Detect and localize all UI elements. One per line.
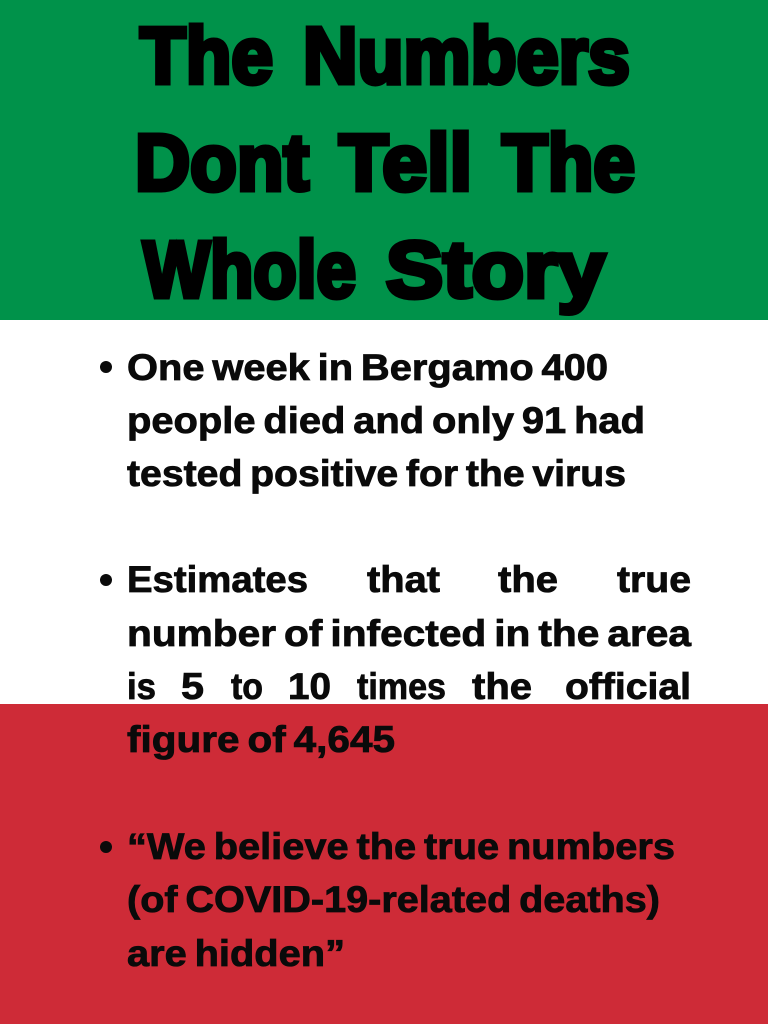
icon: bullet bbox=[100, 361, 112, 373]
bullet point: infection estimates bbox=[100, 559, 691, 760]
text block: infection estimates: official bbox=[565, 666, 691, 707]
text block: infection estimates: the bbox=[472, 666, 532, 707]
text block: infection estimates: the bbox=[498, 559, 558, 600]
title: Story bbox=[386, 225, 606, 314]
title: The bbox=[502, 118, 635, 207]
text block: Bergamo deaths: One week in Bergamo 400 bbox=[127, 347, 608, 388]
text block: infection estimates: to bbox=[231, 666, 263, 707]
text block: Bergamo deaths: tested positive for the virus bbox=[127, 453, 626, 494]
panel: white band bbox=[0, 320, 768, 704]
text block: hidden numbers quote: “We believe the true numbers bbox=[127, 826, 675, 867]
title: The bbox=[140, 11, 273, 100]
text block: infection estimates: Estimates bbox=[127, 559, 308, 600]
text block: infection estimates: true bbox=[617, 559, 691, 600]
title: Numbers bbox=[303, 11, 630, 100]
text block: infection estimates: that bbox=[367, 559, 440, 600]
text block: infection estimates: times bbox=[357, 666, 446, 707]
icon: bullet bbox=[100, 574, 112, 586]
bullet point: Bergamo deaths bbox=[100, 347, 645, 494]
title: Whole bbox=[143, 225, 356, 314]
icon: bullet bbox=[100, 841, 112, 853]
text block: hidden numbers quote: are hidden” bbox=[127, 933, 345, 974]
text block: infection estimates: 10 bbox=[288, 666, 331, 707]
text block: Bergamo deaths: people died and only 91 had bbox=[127, 400, 645, 441]
title bbox=[135, 11, 635, 314]
title: Tell bbox=[339, 118, 472, 207]
panel: green band bbox=[0, 0, 768, 320]
text block: infection estimates: figure of 4,645 bbox=[127, 719, 395, 760]
text block: hidden numbers quote bbox=[127, 826, 675, 974]
text block: infection estimates: is bbox=[127, 666, 156, 707]
text block: infection estimates bbox=[127, 559, 691, 760]
text block: hidden numbers quote: (of COVID-19-related deaths) bbox=[127, 879, 660, 920]
panel: red band bbox=[0, 704, 768, 1024]
text block: Bergamo deaths bbox=[127, 347, 645, 494]
title: Dont bbox=[135, 118, 309, 207]
text block: infection estimates: 5 bbox=[181, 666, 204, 707]
text block: infection estimates: number of infected in the area bbox=[127, 613, 691, 654]
bullet point: hidden numbers quote bbox=[100, 826, 675, 974]
